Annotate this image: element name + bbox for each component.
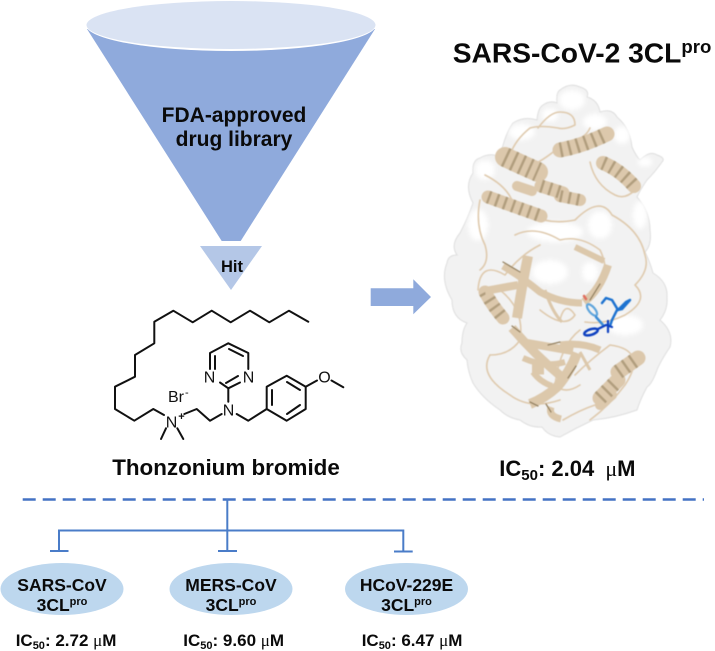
hit triangle	[200, 246, 262, 290]
inhibition tree	[50, 499, 413, 552]
target: HCoV-229E: 3CL	[381, 595, 414, 615]
target: MERS-CoV: MERS-CoV	[185, 575, 277, 595]
IC50 SARS-CoV: μM	[93, 631, 116, 650]
atom labels: O	[318, 370, 331, 386]
IC50 HCoV-229E: IC	[362, 631, 379, 650]
target: MERS-CoV: 3CL	[206, 595, 239, 615]
chemical structure: thonzonium bromide	[115, 311, 343, 439]
helices: solid body	[485, 134, 638, 405]
IC50 HCoV-229E: : 6.47	[391, 631, 439, 650]
bound ligand	[583, 296, 630, 337]
IC50 SARS-CoV: IC	[16, 631, 33, 650]
IC50 HCoV-229E: μM	[439, 631, 462, 650]
atom labels: N	[243, 370, 254, 386]
surface highlights	[468, 90, 652, 335]
atom labels: -	[185, 387, 189, 399]
target: MERS-CoV	[170, 563, 292, 615]
title: SARS-CoV-2 3CLpro: pro	[681, 36, 711, 57]
atom labels: N	[166, 414, 177, 432]
target: SARS-CoV: pro	[70, 596, 88, 608]
arrow to protein	[371, 279, 431, 314]
protein ribbons	[478, 112, 646, 420]
IC50 MERS-CoV: μM	[261, 631, 284, 650]
target: SARS-CoV: SARS-CoV	[17, 575, 107, 595]
IC50 MERS-CoV: : 9.60	[213, 631, 261, 650]
target: SARS-CoV	[0, 563, 124, 615]
funnel label: drug library	[176, 128, 293, 151]
dashed divider	[23, 498, 704, 501]
IC50 value for SARS-CoV-2: 50	[521, 467, 538, 484]
thin loops	[478, 112, 646, 420]
atom labels: +	[178, 411, 185, 423]
IC50 value for SARS-CoV-2: μM	[605, 456, 635, 481]
target: HCoV-229E: pro	[414, 596, 432, 608]
hit label: Hit	[221, 258, 244, 276]
target: HCoV-229E: HCoV-229E	[360, 575, 453, 595]
atom labels	[166, 370, 331, 432]
atom labels: N	[223, 402, 234, 420]
IC50 value for SARS-CoV-2: : 2.04	[538, 456, 600, 481]
molecular surface	[444, 85, 671, 437]
beta sheets	[485, 247, 608, 419]
protein structure with surface	[444, 85, 671, 437]
compound name: Thonzonium bromide	[112, 455, 340, 480]
IC50 MERS-CoV: IC	[183, 631, 200, 650]
helices: coil shading	[485, 134, 638, 398]
target: MERS-CoV: pro	[239, 596, 257, 608]
title: SARS-CoV-2 3CLpro: SARS-CoV-2 3CL	[453, 37, 681, 69]
atom labels: Br	[168, 389, 185, 406]
IC50 SARS-CoV: : 2.72	[45, 631, 93, 650]
atom labels: N	[204, 370, 215, 386]
target: SARS-CoV: 3CL	[37, 595, 70, 615]
funnel label: FDA-approved	[162, 104, 306, 127]
IC50 value for SARS-CoV-2: IC	[499, 456, 521, 481]
funnel: FDA-approved drug library	[86, 0, 376, 241]
target: HCoV-229E	[345, 563, 468, 615]
